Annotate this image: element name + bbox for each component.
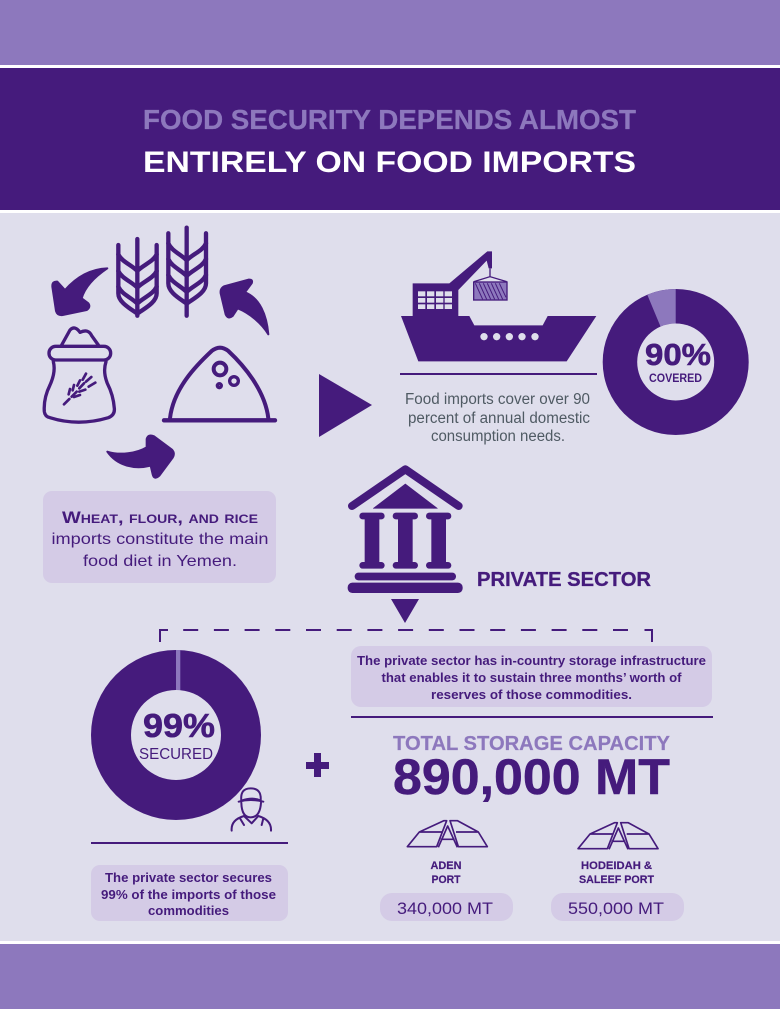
title banner [0, 68, 780, 210]
caption box: private sector secures: commodities [148, 903, 229, 918]
caption box: private sector secures [91, 865, 288, 921]
divider under ship [400, 373, 597, 375]
donut chart: 90% covered [603, 289, 749, 435]
caption box: wheat, flour and rice: food diet in Yemen. [83, 553, 237, 570]
label: aden port: PORT [432, 874, 461, 886]
label: hodeidah and saleef port: HODEIDAH & [581, 860, 652, 872]
label: aden port: ADEN [430, 860, 462, 872]
caption box: wheat, flour and rice: imports constitute the main [52, 531, 268, 548]
caption box: private sector secures: The private sector secures [105, 870, 272, 885]
donut chart: 99% secured [91, 650, 261, 820]
arrow: sack to flour [107, 435, 174, 478]
title line 1: FOOD SECURITY DEPENDS ALMOST [143, 104, 636, 135]
heading: total storage capacity: TOTAL STORAGE CAPACITY [393, 733, 671, 755]
icon: worker [232, 788, 271, 831]
caption box: storage infrastructure: The private sector has in-country storage infrastructure [357, 653, 706, 668]
value box: aden [380, 893, 513, 921]
figure: 890,000 MT: 890,000 MT [393, 749, 670, 805]
plus sign [306, 753, 329, 777]
label: aden port [430, 860, 462, 886]
caption box: storage infrastructure: reserves of those commodities. [431, 687, 632, 702]
icon: cargo ship [401, 251, 596, 361]
arrow: down triangle [391, 599, 419, 623]
text: food imports cover: Food imports cover over 90 [405, 391, 590, 408]
value box: hodeidah and saleef [551, 893, 684, 921]
caption box: wheat, flour and rice [43, 491, 276, 583]
label: hodeidah and saleef port: SALEEF PORT [579, 874, 654, 886]
text: food imports cover: consumption needs. [431, 428, 565, 445]
arrow: right triangle [319, 374, 372, 437]
arrow: flour to wheat [221, 280, 268, 334]
heading: private sector: PRIVATE SECTOR [477, 569, 652, 591]
dashed bracket [160, 630, 652, 642]
donut chart: 99% secured: SECURED [139, 746, 213, 763]
caption box: wheat, flour and rice: Wheat, flour, and rice [62, 508, 258, 527]
icon: grain sack [44, 328, 114, 422]
value box: hodeidah and saleef: 550,000 MT [568, 899, 664, 918]
label: hodeidah and saleef port [579, 860, 654, 886]
value box: aden: 340,000 MT [397, 899, 493, 918]
text: food imports cover: percent of annual domestic [408, 410, 590, 427]
top band [0, 0, 780, 65]
text: food imports cover [405, 391, 590, 445]
donut chart: 90% covered: 90% [645, 338, 711, 372]
bottom band [0, 941, 780, 1009]
donut chart: 99% secured: 99% [143, 707, 215, 744]
arrow: wheat to sack [52, 268, 107, 315]
caption box: private sector secures: 99% of the imports of those [101, 887, 276, 902]
icon: food cycle [44, 228, 275, 478]
title line 2: ENTIRELY ON FOOD IMPORTS [143, 146, 636, 179]
divider under donut [91, 842, 288, 844]
icon: wheat left [118, 239, 157, 316]
icon: hodeidah port [578, 823, 658, 849]
divider under storage box [351, 716, 713, 718]
icon: bank building [348, 469, 463, 593]
caption box: storage infrastructure: that enables it to sustain three months’ worth of [382, 670, 682, 685]
icon: wheat right [168, 228, 206, 316]
icon: aden port [407, 821, 487, 847]
caption box: storage infrastructure [351, 646, 712, 707]
donut chart: 90% covered: COVERED [649, 373, 702, 385]
icon: flour pile [164, 348, 275, 420]
